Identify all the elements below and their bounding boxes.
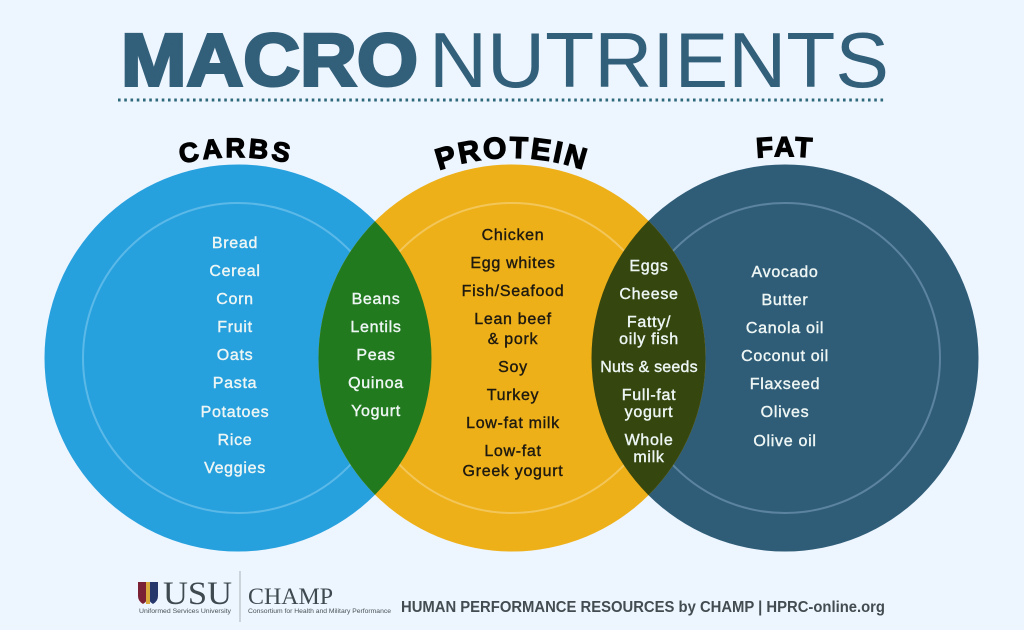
protein food list: Chicken bbox=[482, 227, 544, 244]
carbs and protein food list: Beans bbox=[352, 291, 400, 308]
protein and fat food list: Whole bbox=[625, 432, 673, 449]
carbs food list bbox=[201, 235, 269, 477]
protein food list: Egg whites bbox=[470, 255, 556, 272]
panel: protein circle bbox=[318, 164, 706, 552]
title bbox=[121, 16, 889, 104]
fat food list: Flaxseed bbox=[750, 376, 820, 393]
fat food list: Olive oil bbox=[753, 433, 817, 450]
dotted divider bbox=[118, 98, 886, 102]
heading: protein: PROTEIN bbox=[434, 136, 588, 170]
protein and fat food list bbox=[600, 258, 698, 466]
protein food list: Fish/Seafood bbox=[462, 283, 564, 300]
title: NUTRIENTS bbox=[429, 16, 889, 104]
carbs food list: Bread bbox=[212, 235, 258, 252]
protein food list: Low-fat bbox=[484, 443, 542, 460]
title: MACRO bbox=[121, 18, 418, 102]
footer credit: HUMAN PERFORMANCE RESOURCES by CHAMP | HPRC-online.org bbox=[401, 599, 885, 616]
carbs food list: Rice bbox=[218, 432, 252, 449]
carbs and protein food list: Lentils bbox=[350, 319, 402, 336]
protein and fat food list: Cheese bbox=[619, 286, 679, 303]
protein food list: Soy bbox=[498, 359, 528, 376]
protein food list: Low-fat milk bbox=[466, 415, 560, 432]
carbs and protein food list: Yogurt bbox=[351, 403, 401, 420]
heading: carbs: CARBS bbox=[179, 138, 290, 163]
fat food list: Avocado bbox=[752, 264, 818, 281]
protein and fat food list: Fatty/ bbox=[627, 314, 671, 331]
fat food list bbox=[741, 264, 829, 450]
icon: USU shield bbox=[138, 582, 158, 604]
protein food list: & pork bbox=[488, 331, 539, 348]
protein and fat food list: oily fish bbox=[619, 331, 679, 348]
panel: fat circle bbox=[592, 164, 978, 552]
carbs and protein food list: Quinoa bbox=[348, 375, 404, 392]
protein and fat food list: Full-fat bbox=[622, 387, 676, 404]
carbs food list: Pasta bbox=[213, 375, 257, 392]
carbs food list: Veggies bbox=[204, 460, 266, 477]
logo divider bbox=[239, 571, 241, 622]
protein and fat food list: yogurt bbox=[625, 404, 673, 421]
protein food list: Lean beef bbox=[474, 311, 552, 328]
fat food list: Olives bbox=[761, 404, 809, 421]
protein food list: Turkey bbox=[487, 387, 539, 404]
carbs food list: Corn bbox=[216, 291, 254, 308]
carbs and protein food list bbox=[348, 291, 404, 420]
logo: CHAMP: Consortium for Health and Military Performance bbox=[248, 608, 392, 615]
fat food list: Coconut oil bbox=[741, 348, 829, 365]
protein food list: Greek yogurt bbox=[463, 463, 563, 480]
panel: carbs and protein overlap bbox=[318, 221, 432, 495]
protein and fat food list: Nuts & seeds bbox=[600, 359, 698, 376]
protein and fat food list: Eggs bbox=[629, 258, 669, 275]
carbs and protein food list: Peas bbox=[356, 347, 396, 364]
fat food list: Canola oil bbox=[746, 320, 824, 337]
fat food list: Butter bbox=[762, 292, 808, 309]
carbs food list: Fruit bbox=[217, 319, 253, 336]
logo: CHAMP: CHAMP bbox=[248, 584, 333, 609]
carbs food list: Potatoes bbox=[201, 404, 269, 421]
protein and fat food list: milk bbox=[633, 449, 665, 466]
heading: fat: FAT bbox=[756, 136, 814, 158]
carbs food list: Oats bbox=[217, 347, 253, 364]
logo: USU bbox=[139, 576, 232, 615]
logo: USU: Uniformed Services University bbox=[139, 608, 232, 615]
protein food list bbox=[462, 227, 564, 480]
panel: carbs circle bbox=[44, 164, 432, 552]
logo: CHAMP bbox=[248, 584, 392, 615]
carbs food list: Cereal bbox=[209, 263, 261, 280]
panel: protein and fat overlap bbox=[592, 220, 706, 496]
logo: USU: USU bbox=[163, 576, 232, 612]
